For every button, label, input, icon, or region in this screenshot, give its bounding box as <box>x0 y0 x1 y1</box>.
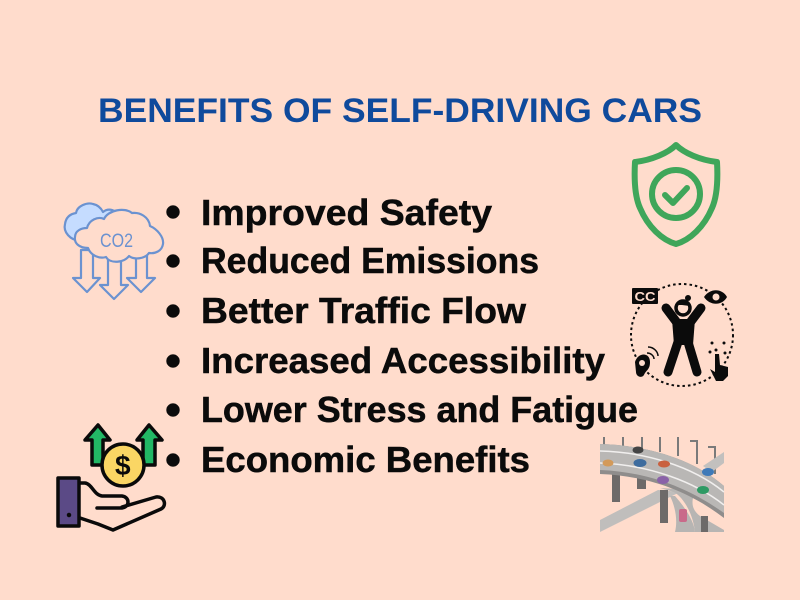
sleeve <box>58 478 79 526</box>
bulleted list of benefits: Better Traffic Flow <box>201 290 527 331</box>
up arrows <box>85 425 162 465</box>
icon: hand holding coin with up arrows <box>58 425 164 530</box>
bulleted list of benefits: Increased Accessibility <box>201 340 605 381</box>
bulleted list of benefits: Economic Benefits <box>201 439 530 480</box>
icon: CO2 cloud with down arrows <box>65 203 163 299</box>
eye <box>704 290 727 304</box>
background ramp <box>703 452 724 472</box>
hand outline <box>80 483 164 530</box>
cars <box>602 446 714 522</box>
ear with sound waves <box>635 347 658 377</box>
icon: highway interchange with cars <box>600 437 724 532</box>
coin <box>102 444 144 486</box>
bulleted list of benefits <box>166 192 638 480</box>
lamp posts <box>604 437 715 474</box>
icon: accessibility figure <box>631 284 733 386</box>
title: BENEFITS OF SELF-DRIVING CARS <box>98 92 702 130</box>
person figure <box>666 295 701 372</box>
CO2 label: CO2 <box>100 231 133 252</box>
elevated curved road <box>600 444 724 518</box>
bulleted list of benefits: Improved Safety <box>201 192 492 233</box>
icon: shield with check mark <box>635 145 717 244</box>
bulleted list of benefits: Reduced Emissions <box>201 240 539 281</box>
lower ramps <box>600 490 680 532</box>
icon: hand holding coin with up arrows: $ <box>115 450 131 481</box>
hand with braille dots <box>708 342 728 381</box>
closed captions box: CC <box>634 289 656 304</box>
pillars <box>612 474 708 532</box>
bulleted list of benefits: Lower Stress and Fatigue <box>201 389 638 430</box>
